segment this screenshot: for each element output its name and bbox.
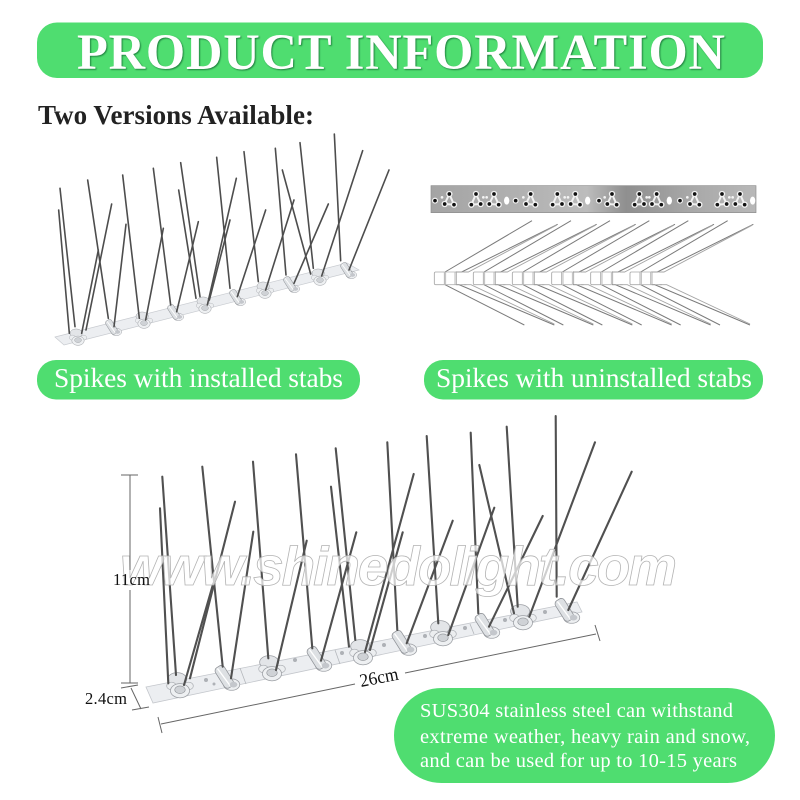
- dimension: length 26cm: [158, 625, 600, 733]
- dimension: height 11cm: 11cm: [113, 570, 150, 589]
- label pill: installed: Spikes with installed stabs: [54, 362, 343, 393]
- subheading: two versions: Two Versions Available:: [38, 100, 314, 130]
- callout: stainless steel: SUS304 stainless steel can withstand: [420, 700, 733, 722]
- watermark: www.shinedolight.com: [120, 535, 677, 597]
- callout: stainless steel: extreme weather, heavy rain and snow,: [420, 726, 750, 748]
- metal base strip: [431, 186, 756, 213]
- large product photo: [146, 416, 632, 703]
- loose stabs: [434, 221, 753, 325]
- dimension: width 2.4cm: 2.4cm: [85, 689, 127, 708]
- base strip: [146, 602, 582, 703]
- spike clips: [167, 597, 580, 698]
- dimension: width 2.4cm: [85, 685, 149, 710]
- product photo: spikes with installed stabs: [55, 134, 389, 345]
- label pill: uninstalled: Spikes with uninstalled stabs: [436, 362, 752, 393]
- spikes: [160, 416, 632, 685]
- product photo: spikes with uninstalled stabs: [431, 186, 756, 325]
- title banner: PRODUCT INFORMATION: [77, 24, 725, 80]
- dimension: length 26cm: 26cm: [358, 665, 401, 692]
- callout: stainless steel: and can be used for up to 10-15 years: [420, 750, 737, 772]
- base strip: [55, 263, 359, 345]
- callout: stainless steel: [394, 688, 775, 783]
- spikes: [59, 134, 389, 333]
- dimension: height 11cm: [113, 475, 150, 683]
